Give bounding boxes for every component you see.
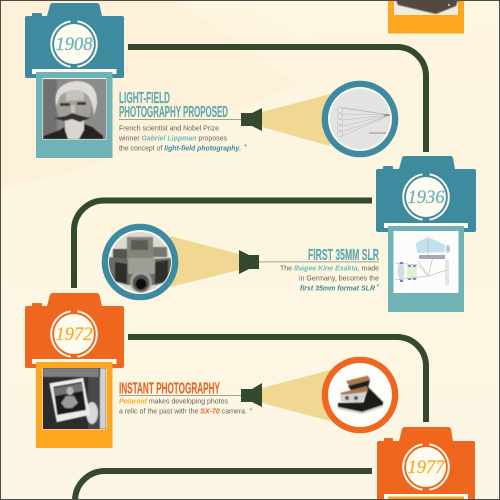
heading: instant photography: INSTANT PHOTOGRAPHY (119, 380, 220, 398)
text block: 1908 (118, 124, 247, 152)
text block: 1972 (119, 396, 252, 416)
text block: 1972: a relic of the past with the SX-70 camera. (119, 406, 247, 416)
light beam: 1908 (262, 94, 330, 146)
heading: first 35mm SLR: FIRST 35MM SLR (308, 247, 379, 264)
leader line: 1972 (119, 394, 242, 397)
polaroid: instant photograph in hands (36, 362, 112, 448)
timeline path: 1972 to 1977 (128, 337, 426, 422)
circle image: Ihagee Kine Exakta camera (102, 224, 178, 300)
camera: 1972 (25, 293, 124, 368)
text block: 1936: in Germany, becomes the (299, 274, 379, 282)
text block: 1972: Polaroid makes developing photos (119, 396, 228, 406)
timeline path: 1908 to 1936 (128, 47, 426, 152)
timeline path: 1936 to 1972 (74, 200, 372, 288)
text block: 1936: * (376, 282, 380, 291)
light beam: 1936 (170, 236, 239, 287)
camera: 1977 (377, 427, 475, 500)
lens: 1936: 1936 (408, 188, 445, 208)
timeline path: 1977 onward (75, 471, 372, 500)
polaroid: Gabriel Lippmann portrait (36, 72, 112, 158)
camera: 1908 (25, 3, 124, 78)
text block: 1908: * (244, 142, 247, 151)
heading: light-field photography proposed (119, 90, 228, 121)
text block: 1972: * (250, 406, 252, 415)
leader line: 1936 (258, 260, 379, 263)
text block: 1908: the concept of light-field photography. (119, 144, 241, 152)
text block: 1936: first 35mm format SLR (300, 284, 376, 292)
polaroid: SLR diagram (388, 226, 464, 312)
circle image: Polaroid SX-70 camera (322, 357, 398, 433)
text block: 1908: winner Gabriel Lippman proposes (118, 134, 227, 142)
lens: 1972: 1972 (56, 325, 92, 345)
projector: 1908 (241, 108, 262, 131)
heading: light-field photography proposed: PHOTOGRAPHY PROPOSED (119, 104, 228, 121)
projector: 1972 (241, 383, 262, 407)
lens: 1908: 1908 (56, 35, 93, 55)
heading: light-field photography proposed: LIGHT-FIELD (119, 90, 170, 107)
light beam: 1972 (262, 370, 330, 421)
camera: 1936 (376, 156, 476, 232)
text block: 1908: French scientist and Nobel Prize (119, 124, 219, 132)
leader line: 1908 (119, 118, 242, 121)
circle image: light-field diagram (322, 81, 398, 157)
text block: 1936: The Ihagee Kine Exakta, made (280, 264, 379, 272)
polaroid: previous entry at top (388, 0, 464, 34)
lens: 1977: 1977 (408, 458, 445, 478)
text block: 1936 (280, 264, 380, 292)
projector: 1936 (239, 250, 259, 274)
